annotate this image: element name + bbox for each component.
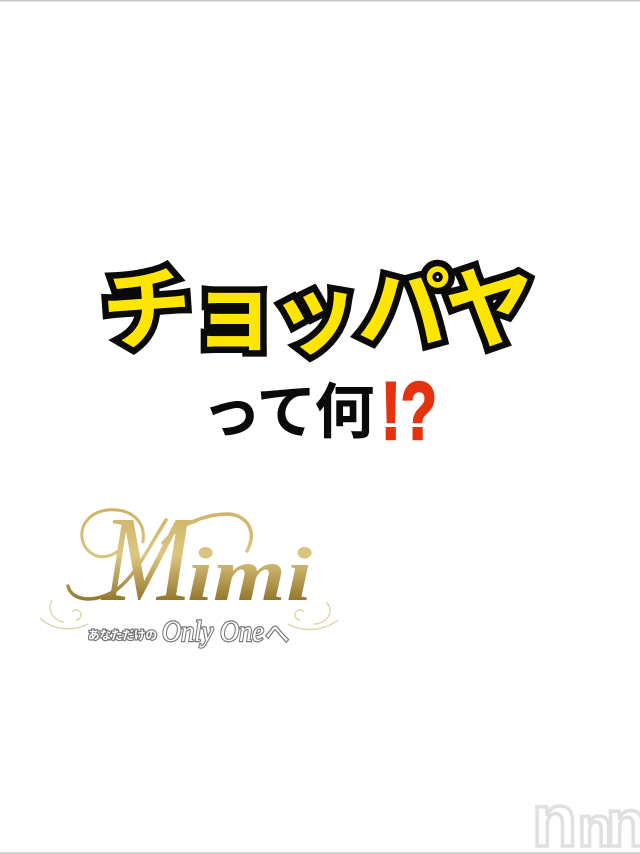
logo tagline: Only One bbox=[162, 615, 264, 648]
logo wordmark: M bbox=[100, 492, 198, 627]
subtitle: って何⁉: って何 bbox=[202, 379, 373, 446]
title: チョッパヤ: ョ bbox=[189, 263, 279, 363]
title: チョッパヤ bbox=[99, 256, 541, 371]
title: チョッパヤ: ッ bbox=[264, 260, 367, 371]
subtitle: って何⁉: !? bbox=[381, 366, 437, 457]
logo wordmark bbox=[100, 492, 312, 627]
subtitle: って何⁉ bbox=[202, 366, 437, 457]
watermark: nnn bbox=[532, 779, 640, 854]
logo: Mimi Only One bbox=[40, 492, 338, 648]
logo tagline: へ bbox=[265, 621, 289, 648]
logo flourish bbox=[68, 510, 251, 599]
title: チョッパヤ: パ bbox=[356, 258, 451, 362]
logo tagline: あなただけの bbox=[88, 629, 157, 642]
logo tagline bbox=[88, 615, 289, 648]
logo ornaments bbox=[40, 600, 338, 630]
title: チョッパヤ: チ bbox=[99, 258, 195, 364]
title: チョッパヤ: ヤ bbox=[441, 256, 541, 365]
logo wordmark: imi bbox=[187, 533, 312, 617]
